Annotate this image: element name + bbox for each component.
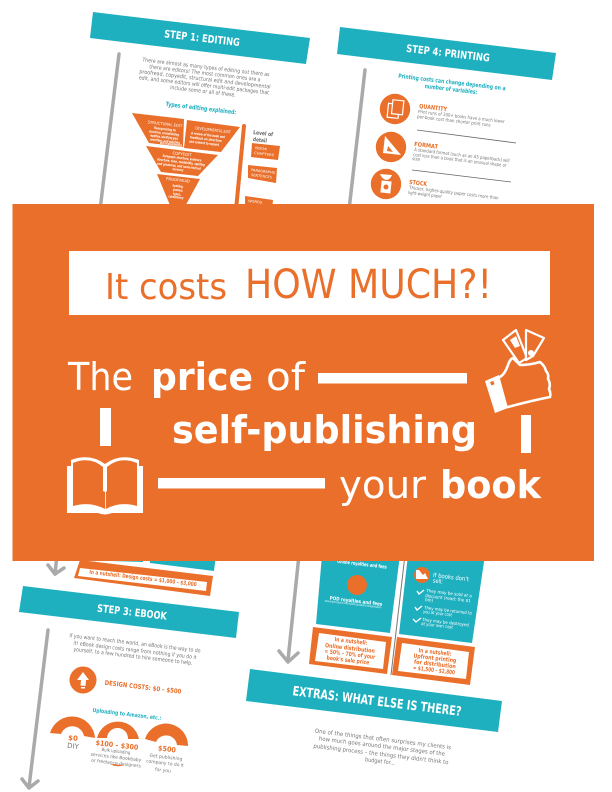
editing pyramid: Spelling,	[172, 184, 184, 189]
callout: online distribution: book's sale price	[326, 656, 370, 667]
progress arrow distribution	[279, 555, 299, 662]
variable: format: cost less than a book that is an unusual shape or	[413, 152, 507, 169]
option: $100 to $300: or freelance designers	[91, 758, 142, 770]
editing intro text: proofread, copyedit, structural edit and developmental	[139, 69, 271, 91]
callout: online distribution: Online distribution	[325, 643, 375, 655]
icon: hand holding money	[485, 330, 550, 413]
ebook intro text: it! eBook design costs range from nothing if you do it	[73, 641, 197, 661]
editing pyramid: PROOFREAD	[166, 176, 190, 184]
editing intro text	[138, 57, 271, 99]
editing pyramid: feedback on structure	[190, 135, 223, 143]
panel: online distribution: POD royalties and fees	[329, 596, 383, 608]
callout: upfront printing: In a nutshell:	[418, 648, 452, 658]
variable: quantity: QUANTITY	[419, 103, 448, 113]
subheading: uploading: Uploading to Amazon, etc.:	[92, 708, 162, 722]
editing pyramid: DEVELOPMENTAL EDIT	[195, 125, 232, 134]
variable: format: FORMAT	[414, 141, 439, 151]
callout: upfront printing: Upfront printing	[413, 654, 457, 665]
printing subheading: Printing costs can change depending on a	[398, 73, 506, 92]
panel: printing for distribution: at your own cost	[421, 621, 453, 631]
header: step 4	[337, 27, 556, 80]
panel: printing for distribution: discount (read: the $1	[425, 593, 471, 604]
option: $500: $500	[158, 744, 176, 754]
panel: online distribution: Online royalties and fees	[337, 559, 387, 571]
callout: online distribution: = 50% – 70% of your	[324, 649, 376, 661]
callout: design costs	[74, 560, 213, 596]
editing intro text: There are almost as many types of editing out there as	[141, 57, 270, 78]
option: $0 DIY	[50, 717, 95, 751]
header: step 3	[19, 586, 239, 638]
title: the price of self-publishing your book: book	[440, 463, 542, 508]
title connector bars	[100, 373, 531, 488]
editing pyramid: STRUCTURAL EDIT	[147, 119, 183, 128]
icon: format set square	[376, 132, 406, 162]
editing pyramid: A review of the book and	[191, 131, 225, 139]
panel: step 4 printing	[337, 27, 556, 210]
title: the price of self-publishing your book: price	[151, 355, 253, 400]
ebook intro text	[69, 633, 201, 667]
panel: step 2 nutshell fragment	[48, 555, 216, 596]
extras intro text: how much goes around the major stages of the	[318, 736, 446, 758]
header: step 1	[90, 12, 310, 64]
icon: quantity pages	[380, 94, 410, 124]
option: $100 to $300: services like Bookbaby	[90, 752, 142, 764]
icon: open book	[67, 457, 143, 514]
editing intro text: include some or all of these.	[170, 85, 236, 99]
progress line step 1	[100, 54, 119, 210]
editing pyramid: grammar,	[173, 188, 183, 193]
option: $500: company to do it	[146, 758, 184, 769]
option: $0 DIY: DIY	[67, 742, 80, 751]
level of detail scale: SENTENCES	[251, 173, 272, 179]
title: the price of self-publishing your book: The	[67, 355, 133, 400]
extras intro text	[313, 729, 451, 767]
editing intro text: there are editors! The most common ones are a	[149, 64, 261, 83]
icon: upload arrow	[70, 666, 96, 694]
subtitle box: it costs how much: HOW MUCH?!	[245, 262, 492, 308]
callout: upfront printing	[392, 637, 475, 685]
editing pyramid: Paragraph structure, sentence	[162, 154, 202, 163]
extras intro text: budget for...	[365, 757, 395, 767]
variable: stock: STOCK	[409, 179, 428, 188]
variable: stock: light-weight paper	[408, 190, 442, 200]
variable: quantity: per-book cost than shorter print runs	[417, 114, 491, 129]
option: $500	[145, 724, 188, 775]
option: $100 to $300: Bulk uploading	[101, 747, 131, 756]
editing pyramid: and content to expand	[189, 139, 219, 147]
level of detail scale: Level of	[253, 130, 274, 138]
editing pyramid: accuracy	[172, 167, 184, 172]
editing pyramid: structure, tone, readability, spelling	[157, 157, 205, 167]
variable: format: size	[412, 156, 421, 163]
ebook intro text: If you want to reach the world, an eBook is the way to do	[69, 633, 201, 655]
panel: printing for distribution	[399, 555, 485, 643]
variable: quantity: Print runs of 300+ books have a much lower	[418, 109, 505, 125]
header: extras	[246, 669, 502, 732]
ebook intro text: yourself, to a few hundred to hire someone to help.	[73, 647, 193, 667]
panel: printing for distribution: If books don't	[433, 572, 470, 583]
editing pyramid: Reorganising to	[154, 126, 177, 133]
panel: printing for distribution: you at your cost	[423, 609, 452, 618]
variable: quantity	[417, 103, 505, 129]
editing pyramid: consistency	[168, 194, 184, 200]
variable: stock: Thicker, higher-quality paper costs more than	[408, 185, 499, 201]
panel: step 3 ebook	[19, 586, 239, 788]
variable: format	[412, 141, 510, 169]
editing pyramid: out inconsistencies	[160, 141, 182, 147]
panel: extras	[246, 669, 502, 767]
panel: step 1 editing	[90, 12, 310, 212]
option: $100 to $300	[90, 722, 142, 770]
progress arrow step 2	[48, 555, 64, 574]
level of detail scale	[236, 126, 280, 210]
teal panel fragments	[77, 555, 216, 571]
icon: stock scales	[371, 169, 401, 199]
printing subheading: number of variables:	[424, 83, 478, 96]
level of detail scale: WORDS	[248, 199, 262, 205]
panel: printing for distribution: bin)	[425, 597, 434, 604]
callout: design costs: In a nutshell: Design costs = $1,000 – $3,000	[89, 570, 197, 588]
title: the price of self-publishing your book	[67, 355, 542, 508]
option: $500: for you	[155, 767, 171, 775]
subtitle box: it costs how much	[69, 251, 550, 315]
title: the price of self-publishing your book: self-publishing	[172, 408, 477, 453]
level of detail scale: detail	[253, 137, 267, 145]
callout: upfront printing: for distribution	[414, 660, 456, 670]
header: step 1: STEP 1: EDITING	[163, 28, 240, 49]
panel: orange title band	[12, 204, 594, 561]
editing intro text: edit, and some editors will offer multi-edit packages that	[138, 75, 269, 97]
panel: online distribution: www.ingramspark.com/hubfs/calculators/compensation	[324, 599, 382, 609]
panel: online distribution	[316, 555, 400, 633]
extras intro text: publishing process – the things they didn't think to	[313, 744, 449, 766]
header: extras: EXTRAS: WHAT ELSE IS THERE?	[292, 684, 462, 720]
title: the price of self-publishing your book: of	[266, 355, 307, 400]
panel: printing for distribution: They may be returned to	[423, 605, 472, 617]
editing pyramid: typos,	[173, 192, 181, 197]
extras intro text: One of the things that often surprises my clients is	[315, 729, 451, 751]
option: $500: Get publishing	[149, 753, 183, 763]
callout: upfront printing: = $1,500 – $2,800	[413, 666, 455, 676]
variable: stock	[408, 179, 499, 201]
subtitle box: it costs how much: It costs	[105, 267, 227, 308]
panel: distribution fragment	[279, 555, 485, 685]
icon: falling chart	[414, 567, 430, 583]
header: step 4: STEP 4: PRINTING	[406, 43, 490, 65]
level of detail scale: CHAPTERS	[254, 151, 274, 157]
editing pyramid: and grammar, and some factual	[157, 162, 201, 171]
variable: format: A standard format (such as an A5 paperback) will	[414, 147, 510, 164]
header: step 3: STEP 3: EBOOK	[96, 603, 168, 623]
progress arrow step 3	[22, 630, 48, 788]
editing pyramid: COPYEDIT	[172, 150, 192, 158]
editing pyramid: repetition, identifying gaps	[150, 134, 178, 141]
panel: printing for distribution: They may be sold at a	[425, 588, 472, 599]
callout: online distribution	[309, 627, 392, 674]
editing pyramid	[132, 113, 240, 212]
title: the price of self-publishing your book: your	[339, 463, 426, 508]
editing pyramid: rewriting, and pointing	[150, 137, 180, 145]
panel: printing for distribution: They may be destroyed	[421, 617, 469, 628]
callout: online distribution: In a nutshell:	[334, 637, 368, 647]
level of detail scale: BOOK	[255, 146, 268, 152]
option: $0 DIY: $0	[68, 734, 78, 743]
panel: printing for distribution: sell:	[433, 578, 443, 586]
subheading: types of editing: Types of editing explained:	[165, 101, 237, 116]
level of detail scale: PARAGRAPHS	[251, 168, 275, 175]
progress line step 4	[349, 70, 365, 210]
editing pyramid: structure, consolidating	[149, 129, 179, 137]
option: $100 to $300: $100 – $300	[95, 739, 139, 752]
label: design costs: DESIGN COSTS: $0 – $500	[104, 679, 182, 696]
